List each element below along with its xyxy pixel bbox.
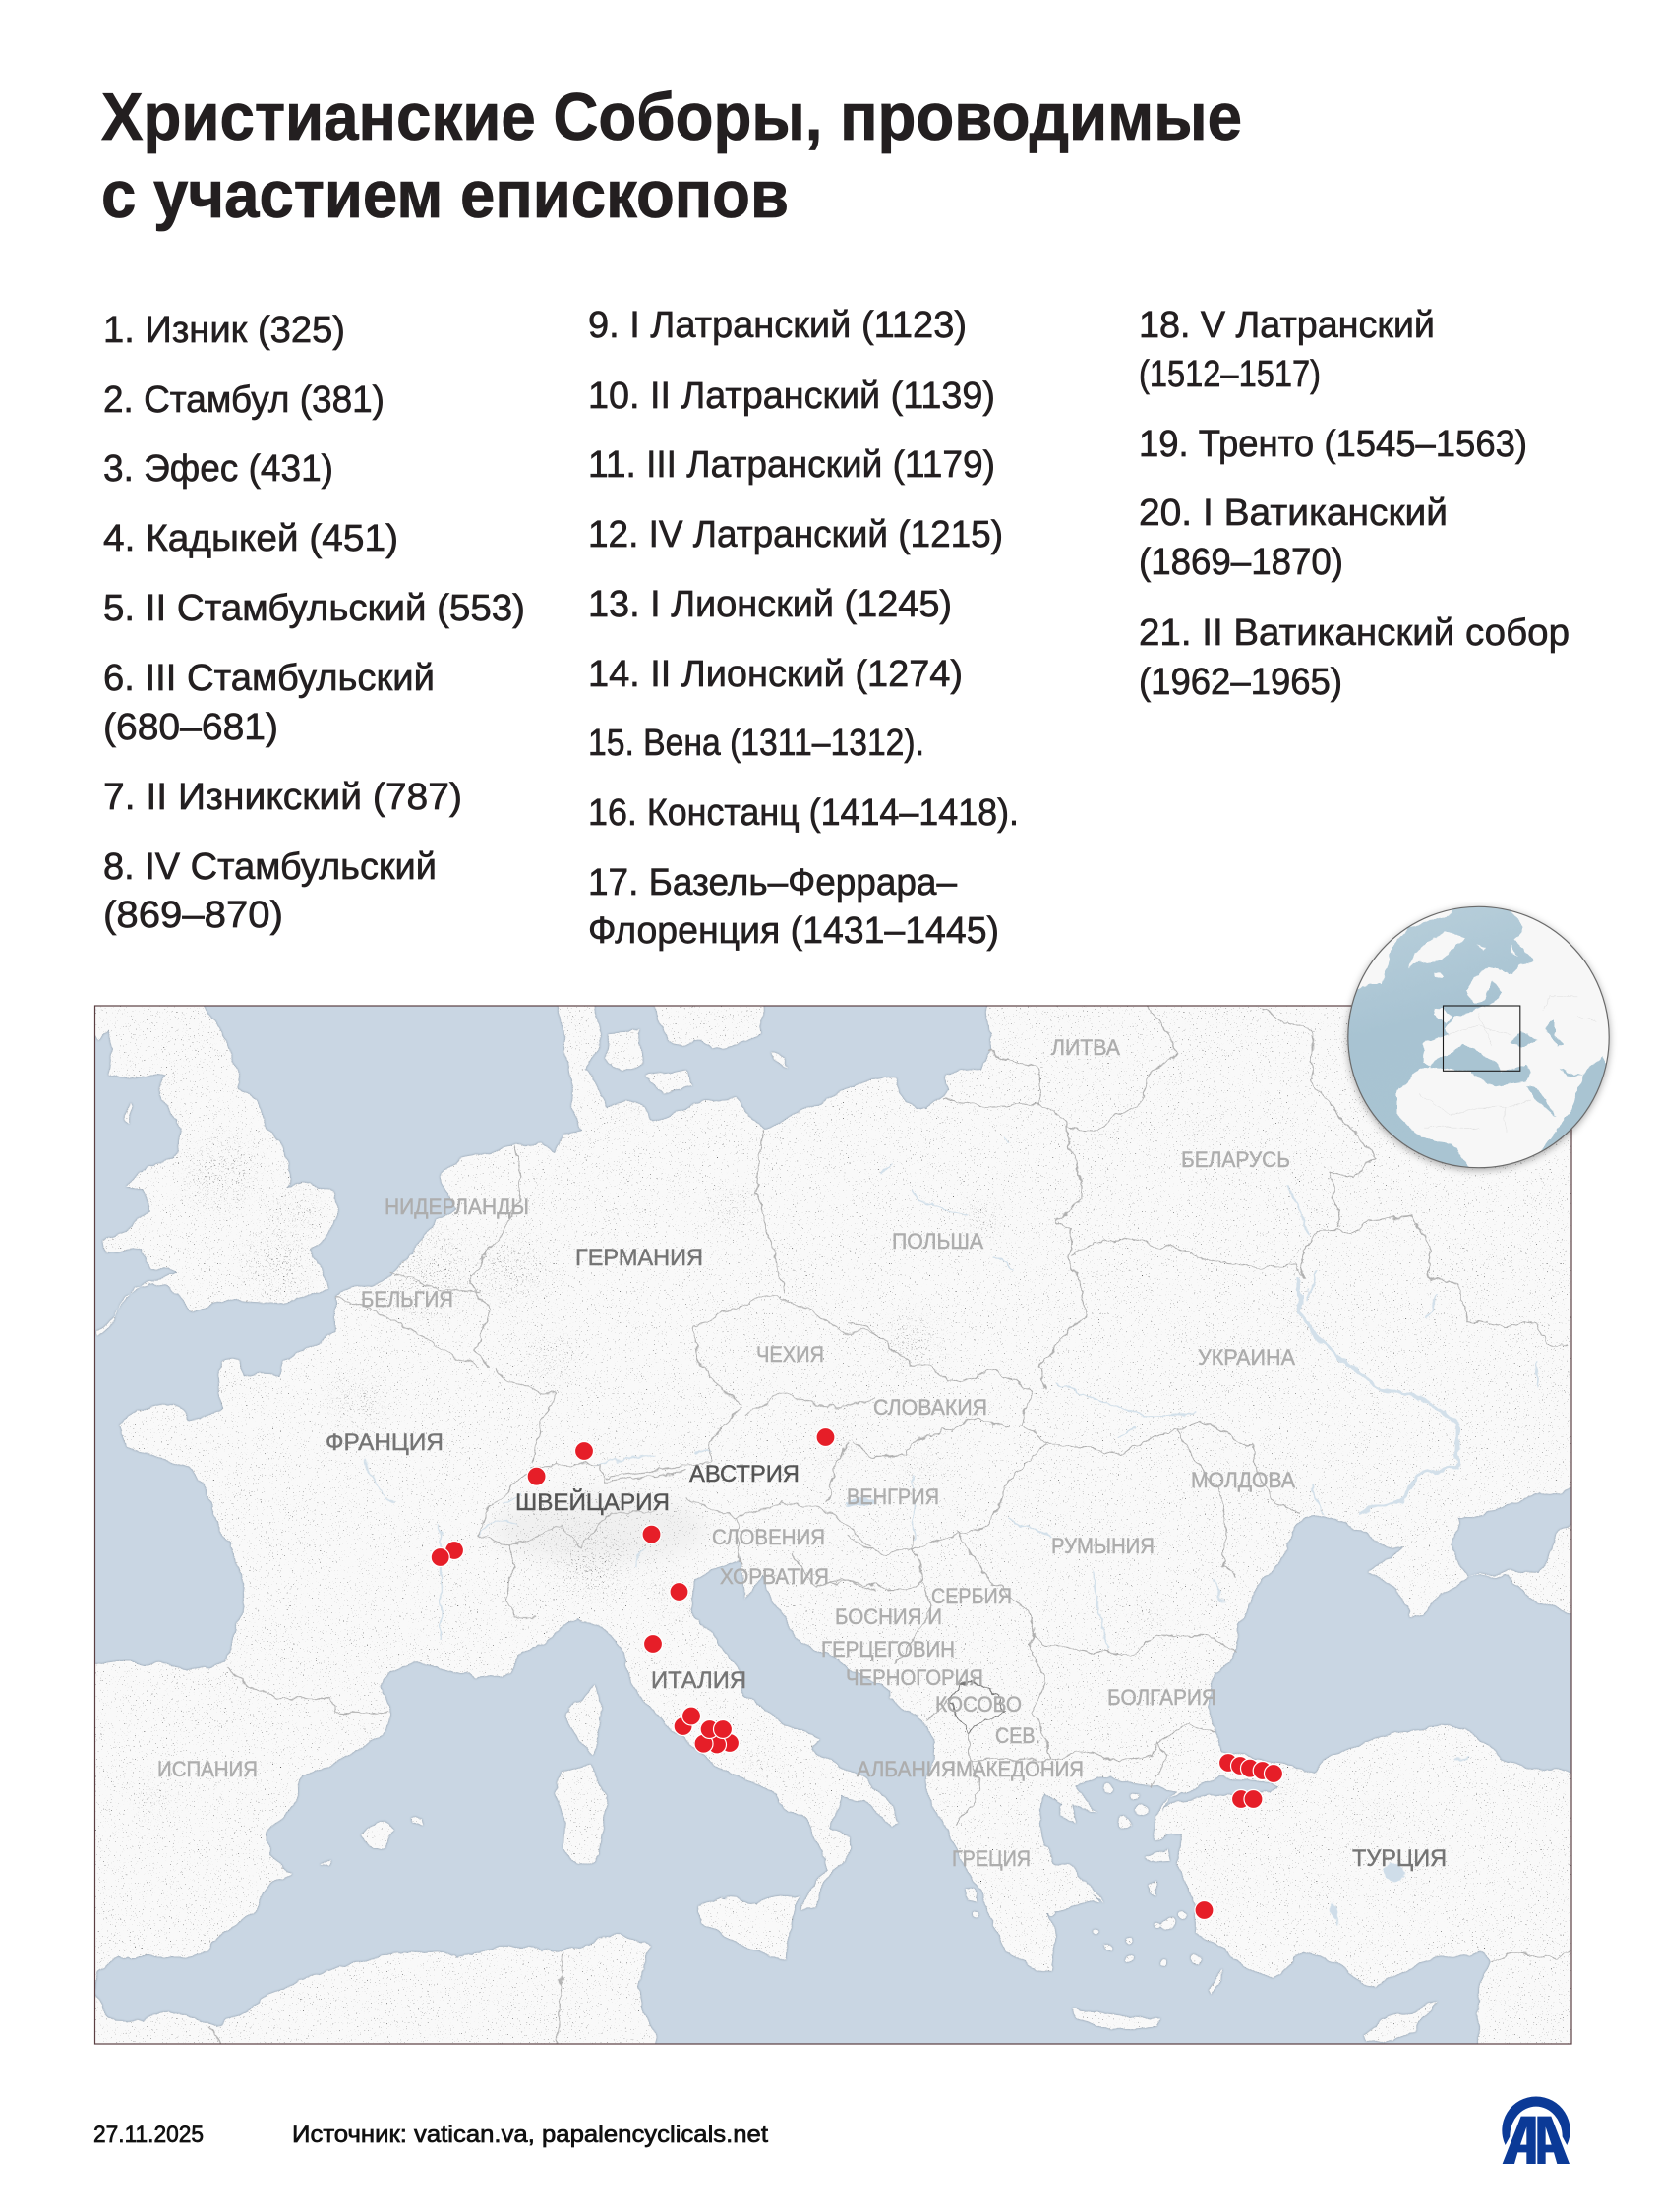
footer date: 27.11.2025 (93, 2122, 204, 2148)
country labels: ШВЕЙЦАРИЯ (515, 1488, 670, 1516)
country labels: БОСНИЯ И (835, 1604, 942, 1629)
list column 3: councils 18–21: 18. V Латранский (1139, 305, 1435, 346)
list column 2: councils 9–17: 13. I Лионский (1245) (588, 584, 952, 625)
country labels: БОЛГАРИЯ (1107, 1685, 1216, 1710)
list column 2: councils 9–17: 12. IV Латранский (1215) (588, 514, 1003, 555)
globe land borders (1420, 996, 1597, 1134)
list column 1: councils 1–8: 6. III Стамбульский (103, 658, 435, 699)
land with settlement speckle (95, 1007, 1571, 2043)
country labels: ЛИТВА (1051, 1035, 1120, 1060)
country labels: МАКЕДОНИЯ (956, 1757, 1084, 1781)
country labels: НИДЕРЛАНДЫ (385, 1194, 529, 1219)
icon: Anadolu Agency logo (1502, 2096, 1570, 2164)
country labels: ВЕНГРИЯ (847, 1484, 939, 1509)
country labels: МОЛДОВА (1191, 1468, 1295, 1492)
list column 2: councils 9–17: 14. II Лионский (1274) (588, 654, 963, 695)
country labels: ГРЕЦИЯ (952, 1846, 1031, 1871)
country labels: УКРАИНА (1198, 1345, 1295, 1369)
list column 1: councils 1–8: 2. Стамбул (381) (103, 379, 385, 421)
list column 1: councils 1–8: 1. Изник (325) (103, 310, 345, 351)
country labels: ГЕРМАНИЯ (575, 1245, 703, 1271)
country labels: ЧЕРНОГОРИЯ (846, 1665, 983, 1690)
list column 3: councils 18–21: (1869–1870) (1139, 542, 1343, 583)
list column 2: councils 9–17 (588, 305, 1019, 952)
title: Христианские Соборы, проводимые (101, 80, 1242, 154)
list column 3: councils 18–21: (1962–1965) (1139, 662, 1342, 703)
list column 1: councils 1–8: 4. Кадыкей (451) (103, 518, 398, 559)
country labels: ПОЛЬША (892, 1229, 983, 1253)
footer source: Источник: vatican.va, papalencyclicals.net (292, 2122, 768, 2148)
list column 3: councils 18–21: (1512–1517) (1139, 354, 1321, 395)
list column 1: councils 1–8: (680–681) (103, 707, 278, 748)
country labels: КОСОВО (935, 1692, 1022, 1717)
globe outline (1348, 906, 1609, 1168)
rivers and lakes (365, 1137, 1538, 1922)
country labels: СЕВ. (995, 1723, 1040, 1748)
list column 2: councils 9–17: 9. I Латранский (1123) (588, 305, 967, 346)
globe inland seas (1430, 1019, 1617, 1152)
country labels: ИСПАНИЯ (157, 1757, 258, 1781)
map border (94, 1006, 1571, 2044)
country labels: СЕРБИЯ (931, 1584, 1012, 1608)
list column 2: councils 9–17: 17. Базель–Феррара– (588, 862, 958, 903)
title: с участием епископов (101, 157, 789, 232)
title (101, 80, 1242, 232)
sea (94, 1006, 1571, 2044)
globe islands (1406, 931, 1518, 1024)
country labels: ЧЕХИЯ (756, 1342, 824, 1367)
list column 3: councils 18–21: 19. Тренто (1545–1563) (1139, 424, 1527, 465)
country labels: ТУРЦИЯ (1352, 1845, 1447, 1872)
country labels: ХОРВАТИЯ (720, 1564, 829, 1589)
country labels: ФРАНЦИЯ (326, 1429, 444, 1456)
country labels: ИТАЛИЯ (651, 1667, 746, 1694)
list column 1: councils 1–8: 8. IV Стамбульский (103, 846, 437, 888)
list column 1: councils 1–8: 5. II Стамбульский (553) (103, 588, 525, 629)
list column 1: councils 1–8: (869–870) (103, 895, 283, 936)
locator rectangle (1444, 1006, 1520, 1071)
list column 2: councils 9–17: 15. Вена (1311–1312). (588, 723, 924, 764)
list column 2: councils 9–17: 11. III Латранский (1179) (588, 444, 995, 486)
country labels: АЛБАНИЯ (857, 1757, 956, 1781)
country labels: БЕЛАРУСЬ (1181, 1147, 1290, 1172)
list column 1: councils 1–8: 3. Эфес (431) (103, 448, 333, 490)
country labels: РУМЫНИЯ (1051, 1534, 1155, 1558)
map of Europe (94, 1005, 1572, 2045)
country labels: ГЕРЦЕГОВИН (821, 1637, 955, 1661)
country labels: СЛОВЕНИЯ (712, 1525, 825, 1549)
country labels: СЛОВАКИЯ (873, 1395, 987, 1420)
list column 3: councils 18–21: 21. II Ватиканский собор (1139, 612, 1570, 654)
list column 1: councils 1–8: 7. II Изникский (787) (103, 777, 462, 818)
globe ocean (1348, 906, 1534, 1167)
list column 3: councils 18–21: 20. I Ватиканский (1139, 493, 1448, 534)
list column 2: councils 9–17: 10. II Латранский (1139) (588, 376, 995, 417)
list column 2: councils 9–17: 16. Констанц (1414–1418). (588, 792, 1019, 834)
country labels: АВСТРИЯ (689, 1461, 800, 1487)
council location markers (431, 1427, 1282, 1919)
national borders (208, 1008, 1571, 2044)
list column 2: councils 9–17: Флоренция (1431–1445) (588, 910, 999, 952)
list column 1: councils 1–8 (103, 310, 525, 936)
country labels: БЕЛЬГИЯ (361, 1287, 453, 1311)
list column 3: councils 18–21 (1139, 305, 1570, 703)
country labels (157, 1035, 1447, 1872)
locator globe (1338, 895, 1617, 1180)
